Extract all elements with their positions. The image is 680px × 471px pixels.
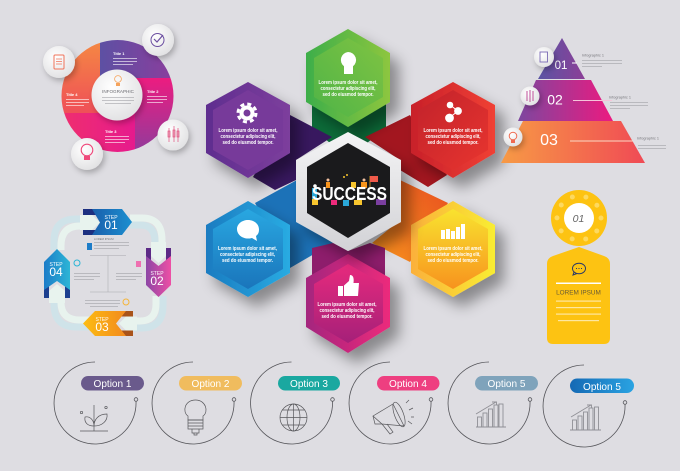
hexagon: green: sed do eiusmod tempor. — [322, 92, 374, 98]
icon: candlestick badge — [158, 120, 188, 150]
icon: light bulb — [185, 400, 206, 435]
icon: growth chart — [476, 402, 506, 427]
badge 01: 01 — [573, 213, 584, 225]
hexagon: blue — [206, 201, 290, 297]
step 03 badge — [83, 311, 137, 336]
centre disc — [92, 70, 142, 120]
panel: yellow card — [547, 190, 610, 344]
hexagon: pink: consectetur adipiscing elit, — [320, 308, 375, 314]
pyramid tier 2: 02 — [547, 92, 563, 108]
hexagon: purple: sed do eiusmod tempor. — [222, 140, 274, 146]
pyramid labels — [582, 54, 666, 149]
panel: four step cycle — [44, 209, 171, 336]
pyramid tier 1: 01 — [555, 60, 567, 72]
icon: speech bubble — [237, 220, 259, 241]
step 01 badge: STEP — [104, 215, 118, 221]
icon: bulb — [341, 52, 356, 74]
step centre notes: LOREM IPSUM — [94, 237, 114, 241]
step 02 badge — [146, 242, 171, 297]
panel: option 3 — [251, 362, 340, 444]
step 04 badge: 04 — [49, 265, 63, 279]
hexagon: blue: consectetur adipiscing elit, — [220, 252, 275, 258]
hexagon: purple: Lorem ipsum dolor sit amet, — [218, 128, 278, 134]
icon: growth chart — [570, 405, 601, 430]
panel: option 5: Option 5 — [488, 378, 526, 390]
pyramid tier 1 — [538, 38, 585, 79]
icon: clipboard badge — [43, 46, 75, 78]
step 02 badge: 02 — [150, 274, 164, 288]
panel: option 2: Option 2 — [192, 378, 230, 390]
pyramid labels: Infographic 1 — [609, 96, 631, 100]
icon: chat — [572, 263, 586, 275]
icon: share — [446, 102, 461, 122]
badge 01 — [551, 190, 607, 246]
hexagon: purple — [206, 82, 290, 178]
centre hexagon: success — [296, 132, 401, 251]
hexagon: green — [306, 29, 390, 127]
hexagon: green: consectetur adipiscing elit, — [320, 86, 376, 92]
hexagon: red: sed do eiusmod tempor. — [428, 140, 479, 146]
circle segments — [60, 38, 176, 156]
hexagon: green: Lorem ipsum dolor sit amet, — [318, 80, 378, 86]
segment labels: Title 4 — [66, 92, 78, 97]
hexagon: pink: sed do eiusmod tempor. — [322, 314, 373, 320]
hexagon: pink: Lorem ipsum dolor sit amet, — [318, 302, 377, 308]
step 02 badge: STEP — [150, 271, 164, 277]
panel: option 4 — [349, 362, 440, 444]
segment labels: Title 2 — [147, 89, 159, 94]
icon: check badge — [142, 24, 174, 56]
panel: option 1 — [54, 362, 144, 444]
icon: gear — [238, 104, 256, 122]
card body: LOREM IPSUM — [556, 290, 601, 296]
panel: option 3: Option 3 — [290, 378, 328, 390]
success figures — [312, 174, 386, 206]
card body — [547, 247, 610, 344]
hexagon: purple: consectetur adipiscing elit, — [220, 134, 276, 140]
pyramid tier 3: 03 — [540, 132, 558, 149]
segment labels: Title 1 — [113, 51, 125, 56]
panel: option 1: Option 1 — [94, 378, 132, 390]
step 01 badge: 01 — [104, 218, 118, 232]
panel: option 6 — [543, 365, 634, 447]
panel: option 5 — [448, 362, 538, 444]
step 04 badge: STEP — [49, 262, 63, 268]
hexagon: blue: sed do eiusmod tempor. — [222, 258, 273, 264]
pyramid labels: Infographic 1 — [637, 136, 659, 140]
panel: option 2 — [152, 362, 242, 444]
pyramid labels: Infographic 1 — [582, 54, 604, 58]
panel: option 6: Option 5 — [583, 381, 621, 393]
step 03 badge: 03 — [95, 320, 109, 334]
step 03 badge: STEP — [95, 317, 109, 323]
cycle ring — [54, 218, 163, 328]
connectors — [253, 100, 448, 285]
icon: bulb badge — [71, 138, 103, 170]
step 01 badge — [80, 209, 132, 235]
panel: circular infographic — [43, 24, 188, 170]
hexagon: yellow: sed do eiusmod tempor. — [428, 258, 479, 264]
hexagon: blue: Lorem ipsum dolor sit amet, — [218, 246, 277, 252]
segment labels: Title 3 — [105, 129, 117, 134]
centre disc: INFOGRAPHIC — [102, 89, 135, 94]
hexagon: red: Lorem ipsum dolor sit amet, — [424, 128, 483, 134]
pyramid tier 3 — [501, 121, 645, 163]
step 04 badge — [44, 249, 70, 303]
hexagon: red: consectetur adipiscing elit, — [426, 134, 481, 140]
panel: pyramid — [501, 38, 666, 163]
pyramid tier 2 — [518, 80, 613, 121]
icon: globe — [280, 404, 307, 431]
hexagon: red — [411, 82, 495, 178]
panel: hexagon diagram — [206, 29, 495, 353]
icon: plant — [80, 405, 108, 431]
hexagon: yellow: Lorem ipsum dolor sit amet, — [424, 246, 483, 252]
hexagon: yellow: consectetur adipiscing elit, — [426, 252, 481, 258]
segment labels — [66, 51, 167, 143]
icon: thumbs up — [338, 275, 359, 296]
panel: option 4: Option 4 — [389, 378, 427, 390]
centre hexagon: success: SUCCESS — [312, 184, 387, 204]
hexagon: yellow — [411, 201, 495, 297]
icon: bar chart — [441, 224, 465, 239]
pyramid badges — [504, 47, 554, 146]
icon: megaphone — [373, 400, 414, 434]
hexagon: pink — [306, 254, 390, 353]
